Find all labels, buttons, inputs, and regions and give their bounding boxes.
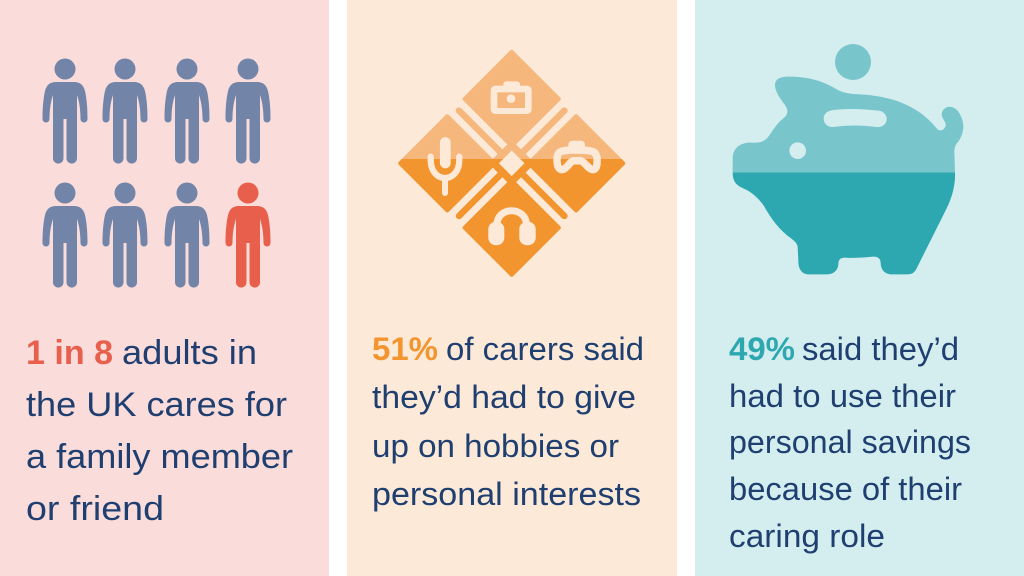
centre diamond <box>499 150 524 176</box>
text: 51% statistic: they’d had to give <box>372 379 636 415</box>
panel: hobbies <box>347 0 677 576</box>
icon: game controller <box>557 141 597 170</box>
text: 51% statistic: of carers said <box>446 331 644 367</box>
right diamond <box>529 116 623 210</box>
icon: camera <box>491 81 532 114</box>
text: 49% statistic: caring role <box>729 518 885 554</box>
icon: microphone <box>431 142 459 193</box>
left diamond <box>400 116 494 210</box>
pig body <box>733 77 963 274</box>
panel: savings <box>695 0 1024 576</box>
icon: eight people, one highlighted <box>42 58 270 288</box>
text: 51% statistic <box>372 331 644 512</box>
text: 49% statistic: had to use their <box>729 378 956 414</box>
text: 1 in 8 statistic <box>26 334 293 528</box>
text: 1 in 8 statistic: adults in <box>122 334 257 372</box>
text: 1 in 8 statistic: or friend <box>26 490 164 528</box>
coin <box>835 44 871 80</box>
text: 1 in 8 statistic: 1 in 8 <box>26 334 113 372</box>
text: 1 in 8 statistic: a family member <box>26 438 293 476</box>
coin slot <box>824 109 887 127</box>
strips crossing the centre <box>459 111 564 216</box>
eye <box>789 142 806 159</box>
text: 51% statistic: personal interests <box>372 476 641 512</box>
top diamond <box>465 52 559 146</box>
text: 51% statistic: 51% <box>372 331 438 367</box>
text: 49% statistic <box>729 331 971 554</box>
text: 49% statistic: because of their <box>729 471 962 507</box>
bottom diamond <box>465 181 559 275</box>
text: 49% statistic: personal savings <box>729 424 971 460</box>
text: 49% statistic: said they’d <box>802 331 959 367</box>
centre square joining the diamonds <box>488 140 535 187</box>
icon: piggy bank with coin <box>733 44 963 274</box>
panel: 1 in 8 adults <box>0 0 329 576</box>
text: 51% statistic: up on hobbies or <box>372 428 619 464</box>
text: 49% statistic: 49% <box>729 331 795 367</box>
icon: headphones <box>488 211 536 245</box>
icon: hobbies diamond <box>400 52 623 275</box>
text: 1 in 8 statistic: the UK cares for <box>26 386 287 424</box>
